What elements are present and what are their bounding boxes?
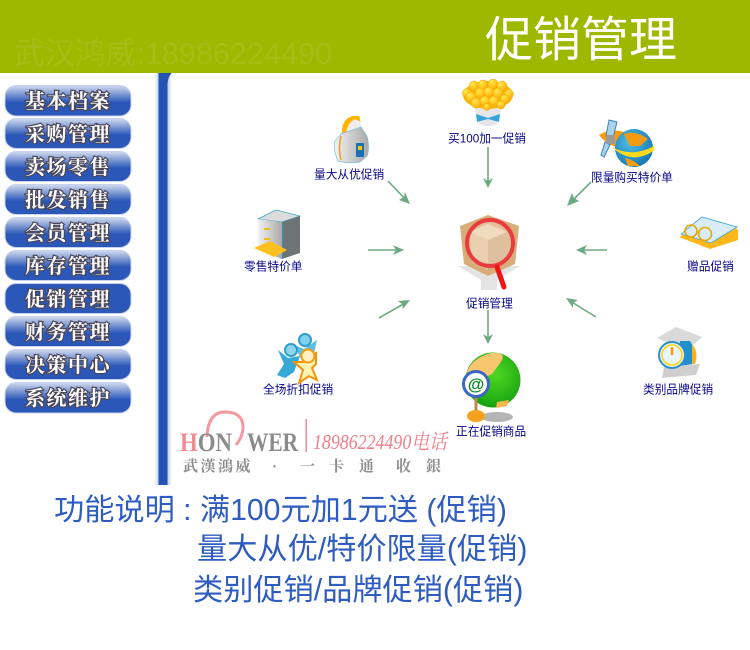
logo subtitle: 通: [359, 458, 374, 475]
logo wordmark HON: HON: [180, 428, 232, 457]
icon: weighing scale: [657, 327, 702, 378]
menu button: 会员管理: [5, 218, 131, 248]
title: 促销管理: [485, 14, 677, 67]
logo subtitle: 銀: [426, 458, 441, 475]
icon: gift promotion notebook and glasses: [679, 217, 738, 249]
arrow: lower right to center: [566, 298, 596, 317]
label: 全场折扣促销: 全场折扣促销: [263, 382, 333, 396]
icon: green globe with at sign: @: [468, 375, 484, 394]
logo subtitle: 卡: [329, 457, 344, 475]
menu button: 采购管理: 采购管理: [25, 123, 111, 146]
header banner: [0, 0, 750, 73]
menu button: 决策中心: [5, 350, 131, 380]
icon: green globe with at sign: [464, 352, 520, 422]
menu button: 采购管理: [5, 118, 131, 148]
description line 2: 量大从优/特价限量(促销): [197, 532, 527, 566]
icon: central box with magnifier: [458, 215, 520, 290]
icon: retail filing cabinet: [254, 210, 300, 259]
label: 量大从优促销: 量大从优促销: [314, 168, 384, 182]
description line 1: 功能说明 : 满100元加1元送 (促销): [54, 493, 507, 527]
menu button: 财务管理: [5, 316, 131, 346]
menu button: 决策中心: 决策中心: [25, 354, 112, 377]
arrow: lower left to center: [379, 300, 410, 318]
function description: [54, 493, 527, 607]
menu button: 会员管理: 会员管理: [25, 222, 111, 245]
arrow: top to center: [483, 147, 493, 188]
watermark phone text: 武汉鸿威:18986224490: [14, 37, 332, 71]
arrow: upper right to center: [567, 182, 591, 206]
logo subtitle: ·: [272, 459, 277, 475]
menu button: 库存管理: [5, 250, 131, 280]
icon: bulk preference printer-like device: [334, 116, 368, 163]
company logo: [180, 412, 450, 475]
menu button: 促销管理 active: 促销管理: [25, 288, 111, 311]
menu button: 基本档案: 基本档案: [25, 89, 111, 113]
icon: people group: [277, 334, 317, 383]
description line 3: 类别促销/品牌促销(促销): [193, 573, 523, 607]
label: 正在促销商品: 正在促销商品: [456, 424, 526, 438]
arrow: right to center: [576, 245, 607, 255]
menu button: 库存管理: 库存管理: [25, 254, 111, 278]
menu button: 卖场零售: 卖场零售: [25, 155, 111, 179]
icon: yellow balloon bouquet: [462, 79, 514, 126]
logo arc: [207, 412, 243, 445]
arrow: center to bottom: [483, 310, 493, 344]
label: 零售特价单: 零售特价单: [244, 260, 303, 274]
arrow: left to center: [368, 245, 404, 255]
logo divider: [306, 419, 307, 452]
menu button: 促销管理 active: [5, 284, 131, 314]
menu button: 财务管理: 财务管理: [25, 321, 111, 344]
label: 类别品牌促销: 类别品牌促销: [643, 382, 713, 396]
logo wordmark WER: WER: [247, 428, 298, 457]
arrow: upper left to center: [388, 181, 410, 204]
label: 赠品促销: 赠品促销: [687, 260, 734, 274]
vertical blue divider bar: [154, 73, 172, 485]
menu button: 批发销售: [5, 184, 131, 214]
logo subtitle: 收: [396, 457, 411, 475]
menu button: 系统维护: 系统维护: [25, 387, 111, 410]
logo subtitle: 一: [300, 459, 315, 475]
logo subtitle: 武漢鴻威: [183, 457, 253, 475]
menu button: 卖场零售: [5, 152, 131, 182]
label: 限量购买特价单: 限量购买特价单: [591, 170, 673, 184]
menu button: 基本档案: [5, 86, 131, 116]
icon: satellite and globe: [599, 120, 654, 167]
menu button: 批发销售: 批发销售: [25, 188, 111, 212]
logo phone: 18986224490电话: [313, 430, 450, 454]
sidebar navigation menu: [5, 86, 131, 413]
label: 买100加一促销: 买100加一促销: [448, 132, 526, 146]
label: 促销管理 center: 促销管理: [466, 296, 513, 310]
menu button: 系统维护: [5, 382, 131, 413]
